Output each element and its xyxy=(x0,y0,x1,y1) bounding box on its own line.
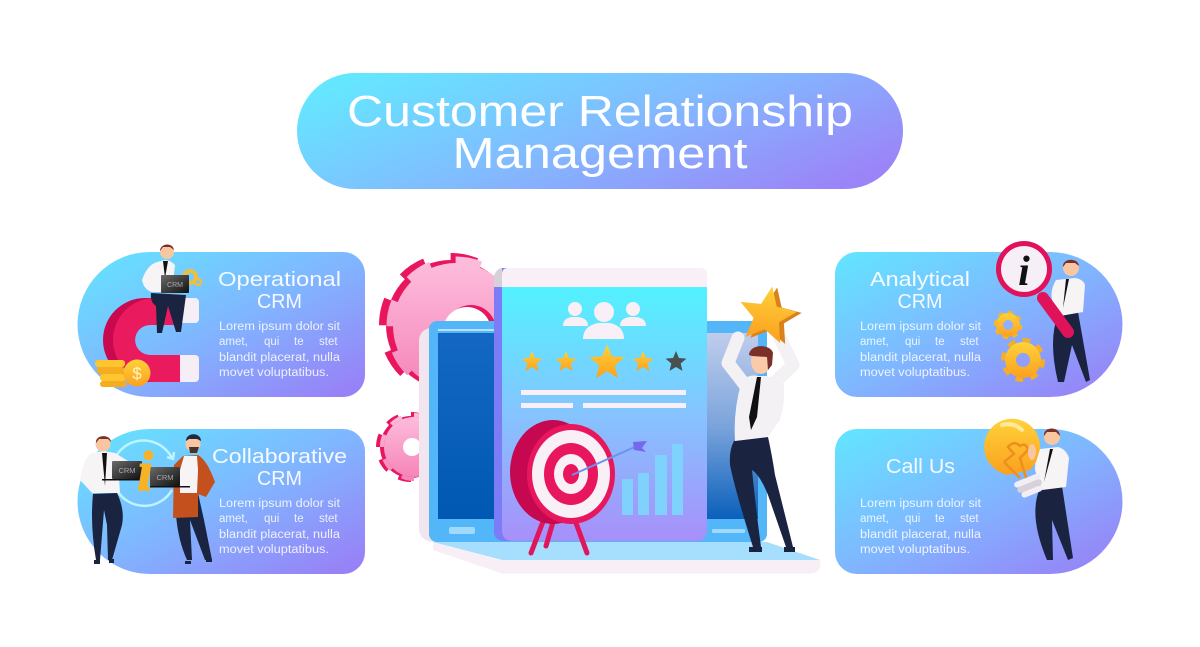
text placeholder lines xyxy=(521,390,686,408)
body text: Lorem ipsum dolor sit xyxy=(219,498,341,510)
title banner xyxy=(297,73,903,189)
body text: stet xyxy=(960,336,979,348)
title: Management xyxy=(452,129,748,178)
body text: movet voluptatibus. xyxy=(219,544,329,556)
icon: magnet xyxy=(103,298,199,382)
icon: gold info i: i xyxy=(137,441,153,503)
body text: Lorem ipsum dolor sit xyxy=(860,498,982,510)
figure: bearded man in coat: CRM xyxy=(156,473,174,482)
body text: Lorem ipsum dolor sit xyxy=(860,321,982,333)
figure: man in shirt: CRM xyxy=(118,466,136,475)
body text: amet, xyxy=(219,513,248,525)
body text: qui xyxy=(264,513,279,525)
heading: Collaborative xyxy=(212,446,347,468)
body text: amet, xyxy=(860,336,889,348)
figure: man xyxy=(1052,260,1090,382)
icon: magnifier with info xyxy=(996,241,1068,332)
icon: target with arrow xyxy=(510,420,647,553)
body text: te xyxy=(935,513,945,525)
body text: movet voluptatibus. xyxy=(860,367,970,379)
body text: Lorem ipsum dolor sit xyxy=(219,321,341,333)
figure: man xyxy=(1035,428,1073,560)
icon: circular arrows xyxy=(114,440,174,506)
heading: CRM xyxy=(898,291,942,313)
icon: user group xyxy=(563,302,646,339)
heading: CRM xyxy=(257,291,302,313)
panel: operational CRM xyxy=(77,244,365,397)
body text: qui xyxy=(905,513,920,525)
icon: gears xyxy=(995,312,1043,380)
body text: stet xyxy=(319,336,338,348)
icon: gold star xyxy=(735,282,805,346)
central illustration xyxy=(378,257,820,574)
rating stars xyxy=(522,344,686,378)
panel: analytical CRM xyxy=(835,241,1122,397)
heading: CRM xyxy=(257,468,302,490)
icon: large pink gear xyxy=(383,257,522,393)
body text: blandit placerat, nulla xyxy=(219,529,341,541)
body text: stet xyxy=(319,513,338,525)
panel: collaborative CRM xyxy=(77,429,365,574)
panel: call us xyxy=(835,419,1122,574)
figure: man with laptop on magnet xyxy=(142,244,201,333)
figure: man holding star xyxy=(728,282,805,552)
figure: man in shirt xyxy=(80,436,142,564)
icon: magnifier with info: i xyxy=(1018,249,1030,295)
body text: qui xyxy=(264,336,279,348)
body text: qui xyxy=(905,336,920,348)
heading: Operational xyxy=(218,269,341,291)
icon: gold coins xyxy=(95,360,150,387)
bar chart xyxy=(622,444,683,515)
body text: te xyxy=(294,336,304,348)
body text: stet xyxy=(960,513,979,525)
body text: movet voluptatibus. xyxy=(219,367,329,379)
body text: amet, xyxy=(860,513,889,525)
title: Customer Relationship xyxy=(347,87,853,136)
figure: man with laptop on magnet: CRM xyxy=(167,282,183,289)
body text: blandit placerat, nulla xyxy=(219,352,341,364)
heading: Analytical xyxy=(870,269,970,291)
figure: bearded man in coat xyxy=(150,434,215,564)
icon: light bulb xyxy=(984,419,1046,500)
icon: gold coins: $ xyxy=(132,364,142,383)
body text: amet, xyxy=(219,336,248,348)
laptop xyxy=(419,321,820,574)
body text: blandit placerat, nulla xyxy=(860,529,982,541)
heading: Call Us xyxy=(886,456,955,478)
report document xyxy=(494,268,707,541)
body text: movet voluptatibus. xyxy=(860,544,970,556)
body text: te xyxy=(294,513,304,525)
icon: small pink gear xyxy=(378,414,446,480)
body text: blandit placerat, nulla xyxy=(860,352,982,364)
body text: te xyxy=(935,336,945,348)
